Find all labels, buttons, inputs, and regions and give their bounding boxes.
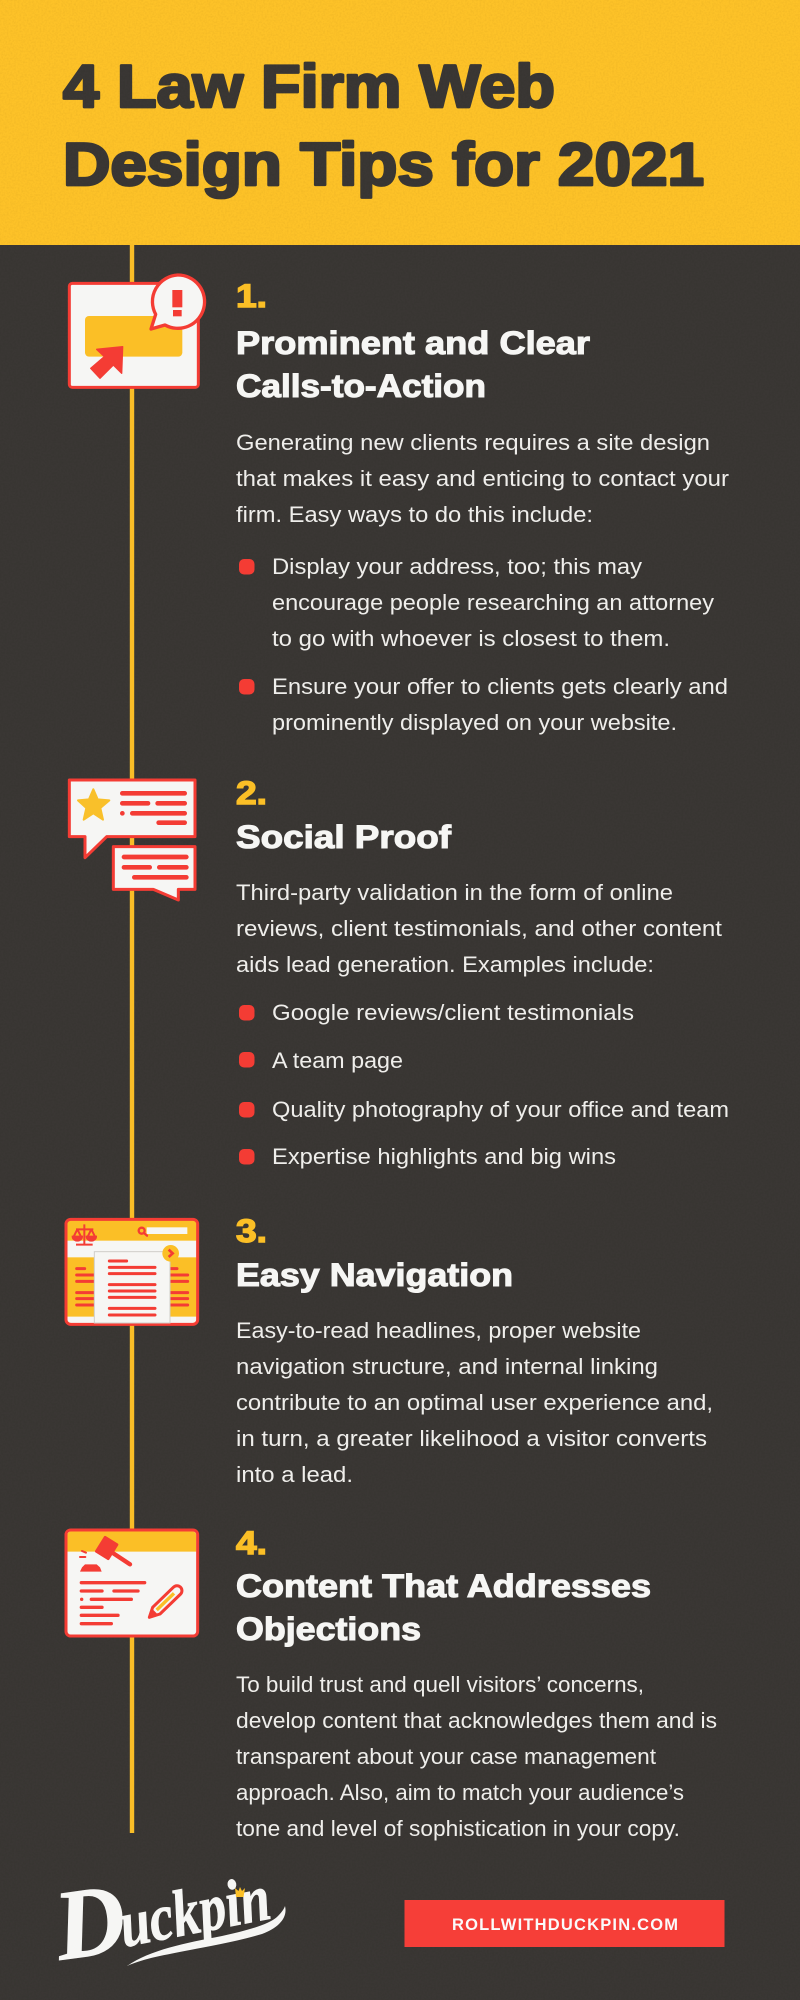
body text: navigation structure, and internal linking <box>236 1354 658 1379</box>
heading: Social Proof <box>236 819 451 855</box>
heading: Content That Addresses <box>236 1568 651 1604</box>
icon: law firm website navigation <box>66 1219 198 1324</box>
intro text: reviews, client testimonials, and other content <box>236 916 722 941</box>
logo: Duckpin: D <box>47 1862 132 1982</box>
bullet list: to go with whoever is closest to them. <box>272 626 670 651</box>
heading: Prominent and Clear <box>236 325 590 361</box>
number: 2. <box>236 775 267 811</box>
body text: To build trust and quell visitors’ concerns, <box>236 1672 644 1697</box>
bullet list: Google reviews/client testimonials <box>272 1000 634 1025</box>
section 3 <box>236 1213 713 1487</box>
body text: tone and level of sophistication in your copy. <box>236 1816 680 1841</box>
intro text: that makes it easy and enticing to contact your <box>236 466 729 491</box>
title: Design Tips for 2021 <box>63 131 704 198</box>
section 1 <box>236 278 729 735</box>
number: 1. <box>236 278 267 314</box>
bullet list: prominently displayed on your website. <box>272 710 677 735</box>
bullet list: Expertise highlights and big wins <box>272 1144 616 1169</box>
bullet list: Ensure your offer to clients gets clearly and <box>272 674 728 699</box>
bullet list: A team page <box>272 1048 403 1073</box>
body text: contribute to an optimal user experience and, <box>236 1390 713 1415</box>
heading: Objections <box>236 1611 421 1647</box>
title <box>63 53 704 198</box>
number: 3. <box>236 1213 267 1249</box>
intro text: Third-party validation in the form of online <box>236 880 673 905</box>
bullet list: Display your address, too; this may <box>272 554 642 579</box>
body text: Easy-to-read headlines, proper website <box>236 1318 641 1343</box>
body text: into a lead. <box>236 1462 353 1487</box>
intro text <box>236 430 729 527</box>
heading <box>236 1568 651 1647</box>
website button: ROLLWITHDUCKPIN.COM <box>452 1916 678 1934</box>
intro text: firm. Easy ways to do this include: <box>236 502 593 527</box>
heading: Calls-to-Action <box>236 368 486 404</box>
title: 4 Law Firm Web <box>63 53 555 120</box>
icon: call-to-action button with alert bubble <box>69 275 205 387</box>
body text: approach. Also, aim to match your audience’s <box>236 1780 684 1805</box>
number: 4. <box>236 1525 267 1561</box>
intro text <box>236 880 722 977</box>
intro text: aids lead generation. Examples include: <box>236 952 654 977</box>
bullet list: encourage people researching an attorney <box>272 590 714 615</box>
bullet list: Quality photography of your office and team <box>272 1097 729 1122</box>
body text: in turn, a greater likelihood a visitor converts <box>236 1426 707 1451</box>
title band <box>0 0 800 245</box>
body text <box>236 1318 713 1487</box>
icon: review speech bubbles <box>69 780 195 900</box>
body text: develop content that acknowledges them and is <box>236 1708 717 1733</box>
website button <box>404 1900 724 1947</box>
section 4 <box>236 1525 717 1841</box>
heading: Easy Navigation <box>236 1257 513 1293</box>
heading <box>236 325 590 404</box>
logo: Duckpin <box>47 1861 286 1982</box>
icon: gavel and pencil document <box>66 1530 198 1636</box>
bullet list <box>239 1000 729 1169</box>
intro text: Generating new clients requires a site design <box>236 430 710 455</box>
logo: Duckpin: uckpin <box>113 1861 276 1962</box>
timeline spine <box>130 245 134 1833</box>
body text: transparent about your case management <box>236 1744 656 1769</box>
body text <box>236 1672 717 1841</box>
bullet list <box>239 554 728 735</box>
section 2 <box>236 775 729 1169</box>
